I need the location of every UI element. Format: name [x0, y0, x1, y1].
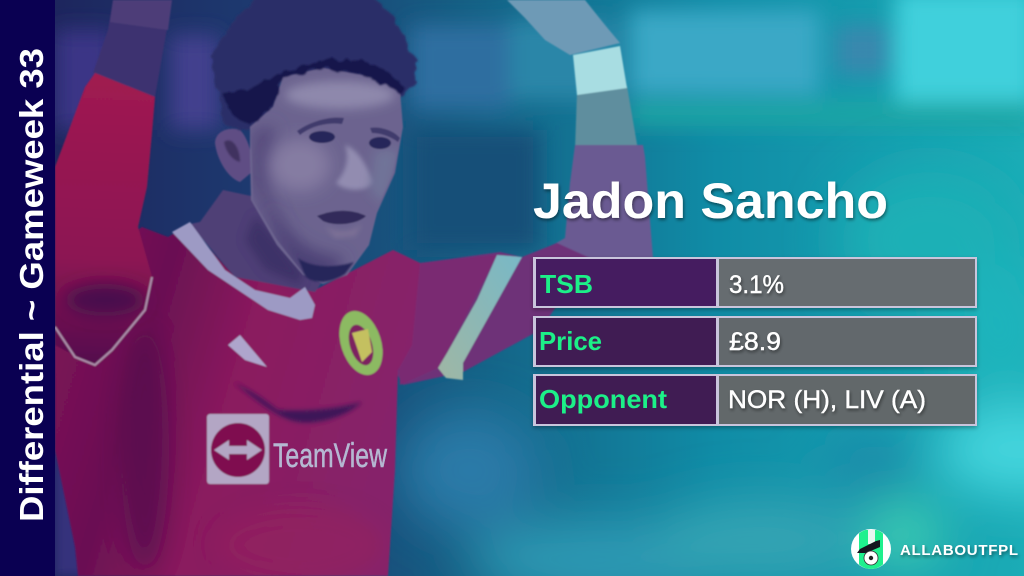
right long undersleeve	[530, 145, 653, 258]
hair back	[210, 0, 416, 130]
left forearm	[93, 0, 172, 97]
sleeve dark fold	[65, 284, 145, 316]
row: Price	[533, 316, 977, 367]
value: Price: £8.9	[729, 328, 781, 356]
player name heading: Jadon Sancho	[533, 173, 888, 229]
right hand	[507, 0, 620, 55]
collar	[172, 222, 315, 320]
sleeve piping	[55, 277, 152, 365]
beard	[298, 258, 354, 282]
sidebar	[0, 0, 55, 576]
crest	[332, 305, 390, 381]
shirt dark folds	[121, 330, 169, 570]
eyebrows	[297, 118, 344, 135]
row: Opponent	[533, 374, 977, 426]
background: left of torso	[55, 450, 95, 576]
face shading	[252, 125, 284, 244]
label: TSB: TSB	[540, 269, 593, 299]
logo	[851, 529, 1018, 570]
left sleeve	[55, 73, 155, 366]
maker's mark	[228, 335, 267, 367]
row: TSB	[533, 257, 977, 308]
neck	[190, 190, 330, 292]
logo icon	[851, 529, 891, 570]
face	[250, 68, 403, 284]
logo wordmark: ALLABOUTFPL	[900, 542, 1018, 559]
value: Opponent: NOR (H), LIV (A)	[728, 386, 926, 414]
cuff stripe	[438, 255, 522, 380]
mouth	[317, 211, 366, 224]
sidebar title: Differential ~ Gameweek 33	[13, 48, 50, 522]
value: TSB: 3.1%	[729, 271, 784, 299]
hair dark fringe	[222, 58, 405, 126]
sponsor text: TeamView	[273, 437, 387, 475]
torso	[55, 225, 420, 576]
nose	[336, 145, 374, 190]
label: Opponent: Opponent	[539, 384, 667, 414]
wristband	[573, 46, 627, 95]
upper sleeve right	[393, 243, 590, 385]
stats table	[533, 257, 977, 426]
sponsor badge	[207, 414, 269, 484]
ear	[215, 129, 252, 182]
eyes	[309, 131, 335, 143]
label: Price: Price	[539, 326, 602, 356]
cheek right	[368, 150, 396, 198]
player photo	[55, 0, 653, 576]
forearm	[575, 86, 638, 150]
